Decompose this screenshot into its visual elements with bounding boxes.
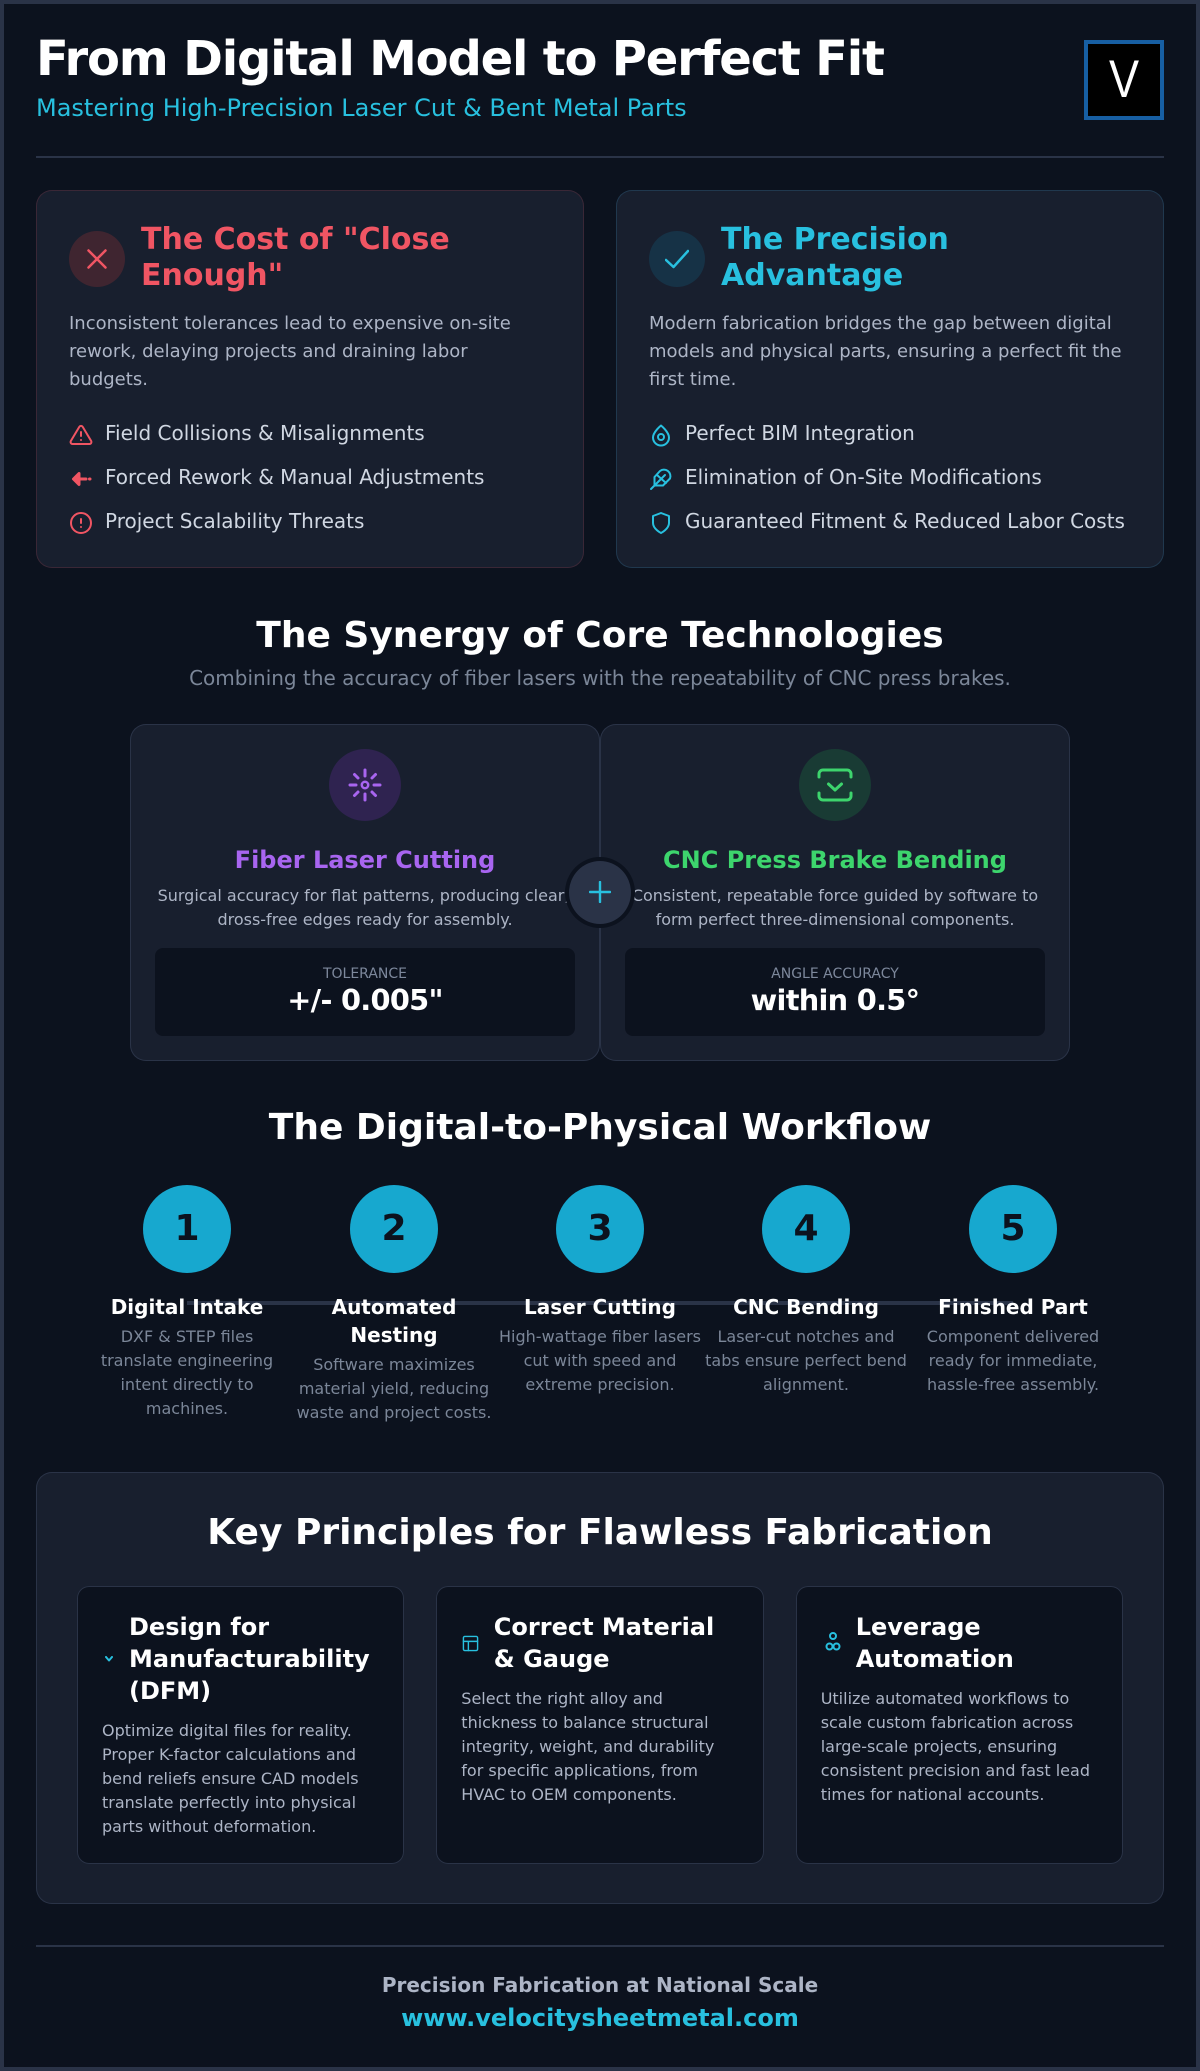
subheading: synergy: Combining the accuracy of fiber lasers with the repeatability of CNC press brakes.: [189, 666, 1011, 690]
card title: material: Correct Material: [494, 1613, 714, 1641]
card: correct material: [436, 1586, 764, 1864]
step 5: Component delivered: [927, 1327, 1099, 1346]
panel: fiber laser: [130, 724, 600, 1061]
step 4: CNC Bending: [733, 1295, 879, 1319]
list item: forced rework: Forced Rework & Manual Adjustments: [105, 465, 484, 489]
heading: key principles: Key Principles for Flawless Fabrication: [207, 1512, 993, 1553]
card title: automation: Automation: [856, 1645, 1014, 1673]
step 4: tabs ensure perfect bend: [705, 1351, 907, 1370]
step 3: extreme precision.: [525, 1375, 675, 1394]
step 2: Software maximizes: [313, 1355, 475, 1374]
description: fiber laser: dross-free edges ready for assembly.: [217, 910, 513, 929]
step 3: cut with speed and: [524, 1351, 676, 1370]
step 5: ready for immediate,: [929, 1351, 1097, 1370]
step 3: High-wattage fiber lasers: [499, 1327, 701, 1346]
card text: material: for specific applications, from: [461, 1761, 698, 1780]
step number 5: [969, 1185, 1057, 1273]
card text: automation: consistent precision and fast lead: [821, 1761, 1090, 1780]
step number 5: 5: [1000, 1208, 1026, 1249]
heading: precision: Advantage: [721, 258, 903, 293]
heading: precision: The Precision: [721, 222, 949, 257]
description: cnc: form perfect three-dimensional components.: [656, 910, 1014, 929]
card title: DFM: Manufacturability: [129, 1645, 370, 1673]
paragraph: precision: [649, 313, 1122, 390]
step 1: Digital Intake: [111, 1295, 263, 1319]
card: design for manufacturability: [77, 1586, 404, 1864]
metric: tolerance: +/- 0.005": [287, 983, 443, 1017]
card title: automation: Leverage: [856, 1613, 981, 1641]
logo: [1084, 40, 1164, 120]
step number 3: [556, 1185, 644, 1273]
metric: angle accuracy: [625, 948, 1045, 1036]
panel: precision advantage: [616, 190, 1164, 568]
paragraph: cost: budgets.: [69, 369, 148, 390]
step number 4: 4: [793, 1208, 819, 1249]
step 3: [499, 1295, 701, 1394]
step 2: waste and project costs.: [297, 1403, 491, 1422]
paragraph: cost: rework, delaying projects and draining labor: [69, 341, 468, 362]
heading: precision: [721, 222, 949, 293]
step 2: Nesting: [350, 1323, 438, 1347]
card text: DFM: [102, 1721, 359, 1836]
step 1: [101, 1295, 273, 1418]
step 5: hassle-free assembly.: [927, 1375, 1099, 1394]
step 2: material yield, reducing: [299, 1379, 489, 1398]
description: fiber laser: [158, 886, 569, 929]
step number 1: 1: [174, 1208, 200, 1249]
step 5: Finished Part: [938, 1295, 1088, 1319]
step 1: machines.: [146, 1399, 228, 1418]
icon: laser: [329, 749, 401, 821]
list item: BIM: Perfect BIM Integration: [685, 421, 915, 445]
step 2: Automated: [332, 1295, 456, 1319]
icon: layout: [462, 1636, 478, 1652]
list item: fitment: Guaranteed Fitment & Reduced Labor Costs: [685, 509, 1125, 533]
icon: plus connector: [565, 857, 635, 928]
paragraph: precision: models and physical parts, ensuring a perfect fit the: [649, 341, 1122, 362]
metric: angle accuracy: within 0.5°: [751, 983, 919, 1017]
card text: DFM: translate perfectly into physical: [102, 1793, 356, 1812]
metric: tolerance: [155, 948, 575, 1036]
step 4: alignment.: [763, 1375, 849, 1394]
title: From Digital Model to Perfect Fit: [36, 31, 884, 87]
subtitle: Mastering High-Precision Laser Cut & Bent Metal Parts: [36, 94, 687, 122]
paragraph: precision: Modern fabrication bridges the gap between digital: [649, 313, 1112, 334]
title: fiber laser: Fiber Laser Cutting: [235, 846, 495, 874]
step 4: Laser-cut notches and: [717, 1327, 895, 1346]
card title: DFM: (DFM): [129, 1677, 211, 1705]
paragraph: precision: first time.: [649, 369, 736, 390]
card text: DFM: Proper K-factor calculations and: [102, 1745, 356, 1764]
step 1: intent directly to: [120, 1375, 254, 1394]
step 3: Laser Cutting: [524, 1295, 676, 1319]
panel: key principles: [36, 1472, 1164, 1904]
heading: cost: The Cost of "Close: [141, 222, 450, 257]
step 1: DXF & STEP files: [121, 1327, 253, 1346]
heading: synergy: The Synergy of Core Technologies: [256, 615, 944, 656]
card text: automation: Utilize automated workflows to: [821, 1689, 1069, 1708]
paragraph: cost: [69, 313, 511, 390]
heading: cost: [141, 222, 450, 293]
list item: elimination: Elimination of On-Site Modifications: [685, 465, 1042, 489]
card title: automation: [856, 1613, 1014, 1673]
card text: DFM: Optimize digital files for reality.: [102, 1721, 352, 1740]
card text: automation: scale custom fabrication across: [821, 1713, 1073, 1732]
step number 2: 2: [381, 1208, 407, 1249]
step 1: translate engineering: [101, 1351, 273, 1370]
step number 1: [143, 1185, 231, 1273]
list item: field collisions: Field Collisions & Misalignments: [105, 421, 425, 445]
panel: cost of close enough: [36, 190, 584, 568]
card title: DFM: Design for: [129, 1613, 269, 1641]
logo: V: [1109, 50, 1139, 109]
connector line: [187, 1301, 1013, 1305]
card text: automation: large-scale projects, ensuring: [821, 1737, 1057, 1756]
card text: material: HVAC to OEM components.: [461, 1785, 677, 1804]
icon: x mark: [69, 231, 125, 287]
step number 2: [350, 1185, 438, 1273]
card title: DFM: [129, 1613, 370, 1705]
step 4: [705, 1295, 907, 1394]
icon: chevron: [105, 1656, 113, 1662]
card text: automation: [821, 1689, 1090, 1804]
footer url: www.velocitysheetmetal.com: [401, 2004, 799, 2032]
card text: material: [461, 1689, 714, 1804]
heading: workflow: The Digital-to-Physical Workflow: [269, 1107, 931, 1148]
title: cnc: CNC Press Brake Bending: [663, 846, 1007, 874]
metric: tolerance: TOLERANCE: [323, 966, 407, 982]
card text: DFM: parts without deformation.: [102, 1817, 316, 1836]
card text: automation: times for national accounts.: [821, 1785, 1044, 1804]
card text: material: thickness to balance structural: [461, 1713, 709, 1732]
card title: material: & Gauge: [494, 1645, 610, 1673]
card: leverage automation: [796, 1586, 1123, 1864]
icon: check mark: [649, 231, 705, 287]
icon: nodes: [826, 1632, 840, 1650]
icon: press brake: [799, 749, 871, 821]
card title: material: [494, 1613, 714, 1673]
step 2: [297, 1295, 491, 1422]
footer tagline: Precision Fabrication at National Scale: [382, 1973, 818, 1997]
card text: material: Select the right alloy and: [461, 1689, 663, 1708]
card text: material: integrity, weight, and durability: [461, 1737, 714, 1756]
step number 4: [762, 1185, 850, 1273]
description: fiber laser: Surgical accuracy for flat patterns, producing clear,: [158, 886, 569, 905]
list item: scalability: Project Scalability Threats: [105, 509, 364, 533]
step 5: [927, 1295, 1099, 1394]
card text: DFM: bend reliefs ensure CAD models: [102, 1769, 359, 1788]
metric: angle accuracy: ANGLE ACCURACY: [771, 966, 899, 982]
heading: cost: Enough": [141, 258, 283, 293]
description: cnc: Consistent, repeatable force guided by software to: [632, 886, 1038, 905]
description: cnc: [632, 886, 1038, 929]
step number 3: 3: [587, 1208, 613, 1249]
paragraph: cost: Inconsistent tolerances lead to expensive on-site: [69, 313, 511, 334]
panel: cnc press brake: [600, 724, 1070, 1061]
